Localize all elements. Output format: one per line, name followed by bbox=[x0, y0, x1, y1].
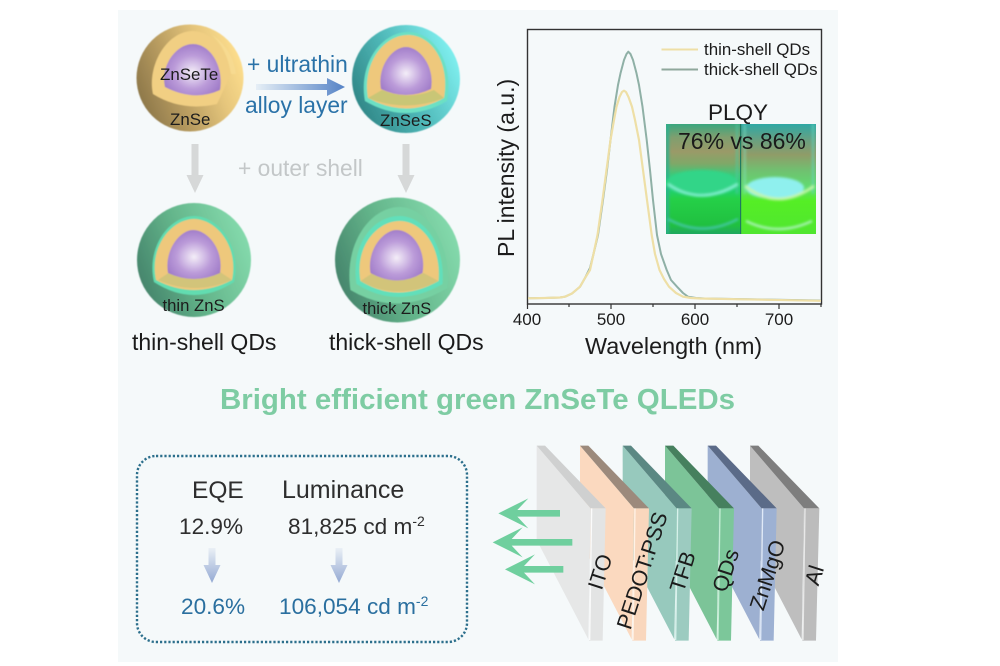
heading: Luminance: Luminance bbox=[282, 476, 404, 504]
legend: thin-shell QDs bbox=[704, 40, 810, 59]
value: EQE before: 12.9% bbox=[179, 514, 243, 539]
plot frame bbox=[528, 30, 822, 304]
text: alloy layer: alloy layer bbox=[245, 92, 348, 118]
curve: thin-shell QDs bbox=[528, 91, 821, 301]
background panel bbox=[118, 10, 838, 662]
emission arrows bbox=[493, 498, 572, 584]
icon: ZnSeS alloy QD bbox=[352, 25, 460, 133]
y axis title: PL intensity (a.u.) bbox=[493, 79, 519, 257]
legend bbox=[662, 40, 818, 79]
chart: PL spectra bbox=[493, 30, 822, 359]
icon: thick-shell QD bbox=[335, 198, 460, 322]
layer labels: ITO bbox=[583, 551, 617, 593]
label: thick-shell QDs: thick-shell QDs bbox=[329, 329, 484, 355]
value: luminance before: 81,825 cd m bbox=[288, 514, 412, 539]
layer labels: ZnMgO bbox=[744, 537, 790, 613]
label: thick ZnS: thick ZnS bbox=[362, 300, 431, 318]
label: thin-shell QDs: thin-shell QDs bbox=[132, 329, 276, 355]
legend: thick-shell QDs bbox=[704, 60, 818, 79]
layer: QDs bbox=[665, 446, 734, 641]
photo: vials under UV bbox=[666, 124, 816, 234]
panel: device metrics bbox=[137, 456, 467, 642]
layer: ITO bbox=[537, 446, 606, 641]
panel: quantum dot structures bbox=[132, 24, 484, 355]
arrow: luminance improvement bbox=[330, 548, 348, 583]
label: thin ZnS: thin ZnS bbox=[162, 296, 225, 315]
label: ZnSeTe: ZnSeTe bbox=[160, 65, 218, 84]
value: luminance after: 106,054 cd m bbox=[279, 594, 416, 619]
layer labels: PEDOT:PSS bbox=[611, 509, 673, 632]
value: EQE after: 20.6% bbox=[181, 594, 245, 619]
arrow: left down bbox=[186, 144, 204, 193]
layer: ZnMgO bbox=[708, 446, 777, 641]
x tick labels bbox=[513, 310, 793, 329]
x axis title: Wavelength (nm) bbox=[585, 333, 762, 359]
layer: PEDOT:PSS bbox=[580, 446, 649, 641]
x tick labels: 600 bbox=[681, 310, 709, 329]
text: PLQY: PLQY bbox=[708, 100, 768, 125]
diagram: QLED device stack bbox=[493, 446, 829, 641]
icon: thin-shell QD bbox=[137, 203, 251, 317]
text: 76% vs 86%: 76% vs 86% bbox=[678, 128, 806, 154]
axis ticks bbox=[528, 304, 821, 309]
layer: Al bbox=[750, 446, 819, 641]
layer labels bbox=[583, 509, 829, 632]
title: Bright efficient green ZnSeTe QLEDs bbox=[220, 384, 735, 416]
x tick labels: 400 bbox=[513, 310, 541, 329]
layer: TFB bbox=[623, 446, 692, 641]
layer labels: TFB bbox=[664, 548, 701, 595]
label: ZnSeS: ZnSeS bbox=[380, 111, 432, 130]
curve: thick-shell QDs bbox=[528, 52, 821, 301]
text: + ultrathin: + ultrathin bbox=[247, 51, 348, 77]
arrow: right down bbox=[398, 144, 414, 193]
dotted frame bbox=[137, 456, 467, 642]
x tick labels: 700 bbox=[765, 310, 793, 329]
text: + outer shell: + outer shell bbox=[238, 155, 363, 181]
arrow: EQE improvement bbox=[204, 548, 220, 583]
x tick labels: 500 bbox=[597, 310, 625, 329]
value: luminance before: -2 bbox=[412, 513, 425, 529]
layer labels: QDs bbox=[707, 546, 744, 595]
heading: EQE: EQE bbox=[192, 477, 244, 504]
layer labels: Al bbox=[799, 562, 829, 588]
value: luminance after: -2 bbox=[416, 593, 429, 609]
label: ZnSe: ZnSe bbox=[170, 110, 210, 129]
icon: ZnSe core-shell QD bbox=[136, 24, 244, 132]
arrow: alloy layer bbox=[256, 78, 345, 96]
